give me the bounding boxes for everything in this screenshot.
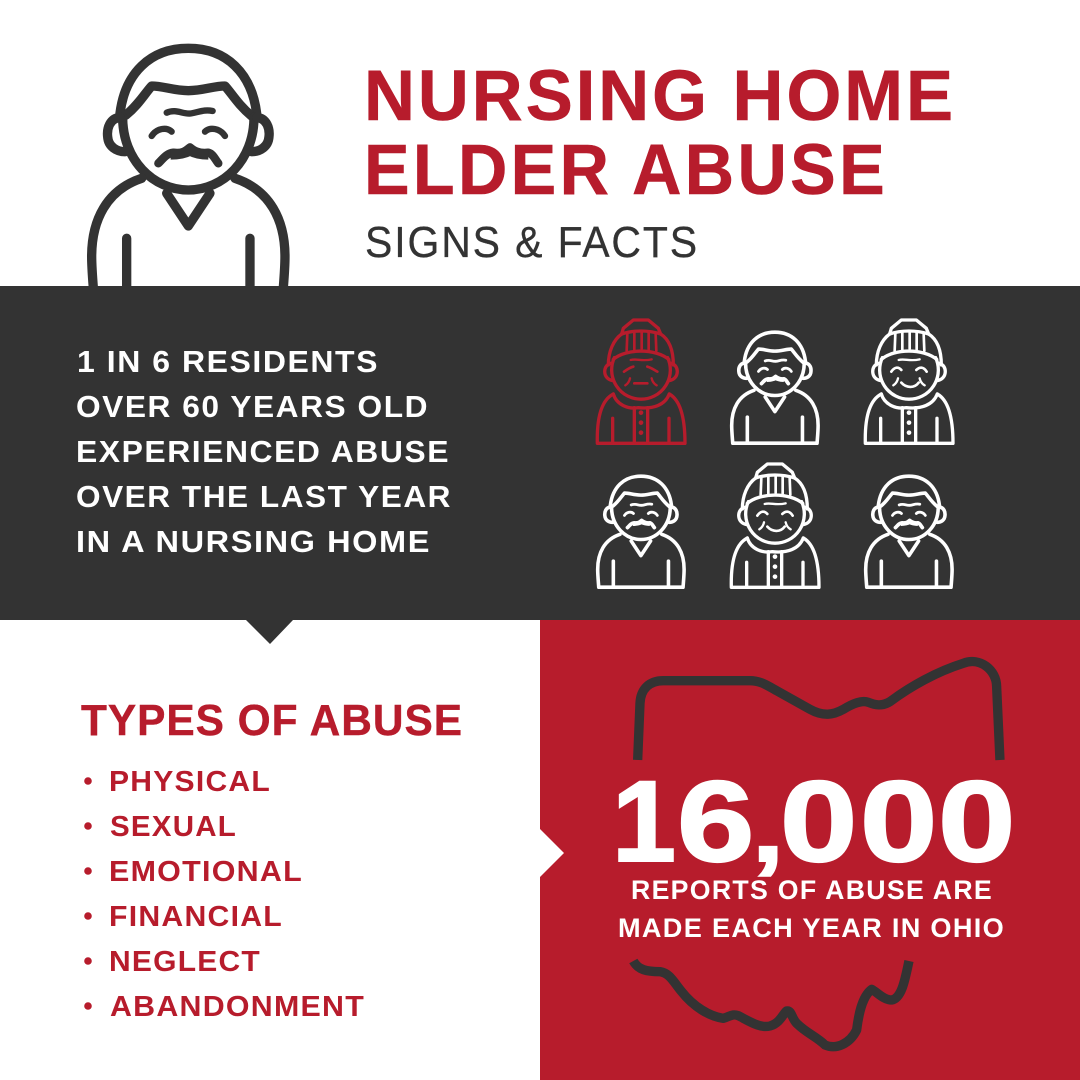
map: Ohio outline top (638, 662, 1000, 760)
list: types of abuse: PHYSICAL (109, 766, 271, 798)
icon: white woman, bottom middle (731, 464, 819, 587)
list: types of abuse: FINANCIAL (109, 901, 283, 933)
list: types of abuse (84, 766, 365, 1023)
title: NURSING HOME (364, 57, 956, 136)
big number: 16,000: 1 (612, 758, 676, 886)
icon: white man, top middle (732, 332, 818, 443)
big number: 16,000: 000 (780, 757, 1015, 886)
subtitle: SIGNS & FACTS (365, 218, 699, 267)
text block: 1 in 6 residents: EXPERIENCED ABUSE (76, 434, 450, 469)
text block: 1 in 6 residents: OVER THE LAST YEAR (76, 479, 452, 514)
list: types of abuse: SEXUAL (110, 811, 237, 843)
text block: reports of abuse: REPORTS OF ABUSE ARE (631, 875, 993, 905)
title (364, 57, 956, 210)
text block: 1 in 6 residents (76, 344, 452, 559)
big number: 16,000: , (752, 776, 784, 882)
text block: 1 in 6 residents: OVER 60 YEARS OLD (76, 389, 429, 424)
list: types of abuse: NEGLECT (109, 946, 261, 978)
icon: red woman, sad (597, 320, 685, 443)
heading: types of abuse: TYPES OF ABUSE (81, 696, 463, 745)
icon: elderly man (92, 48, 285, 297)
text block: reports of abuse: MADE EACH YEAR IN OHIO (618, 913, 1005, 943)
list: types of abuse: EMOTIONAL (109, 856, 303, 888)
text block: reports of abuse (618, 875, 1005, 943)
icon: white woman, top right (865, 320, 953, 443)
icon: white man, bottom right (866, 476, 952, 587)
text block: 1 in 6 residents: IN A NURSING HOME (76, 524, 431, 559)
big number: 16,000: 6 (677, 757, 754, 886)
list: types of abuse: ABANDONMENT (110, 991, 365, 1023)
big number: 16,000 (612, 757, 1015, 886)
panel: red Ohio panel (540, 620, 1080, 1080)
map: Ohio outline bottom (633, 961, 909, 1047)
panel: dark statistic band (0, 286, 1080, 644)
title: ELDER ABUSE (364, 131, 888, 210)
text block: 1 in 6 residents: 1 IN 6 RESIDENTS (77, 344, 379, 379)
icon: white man, bottom left (598, 476, 684, 587)
